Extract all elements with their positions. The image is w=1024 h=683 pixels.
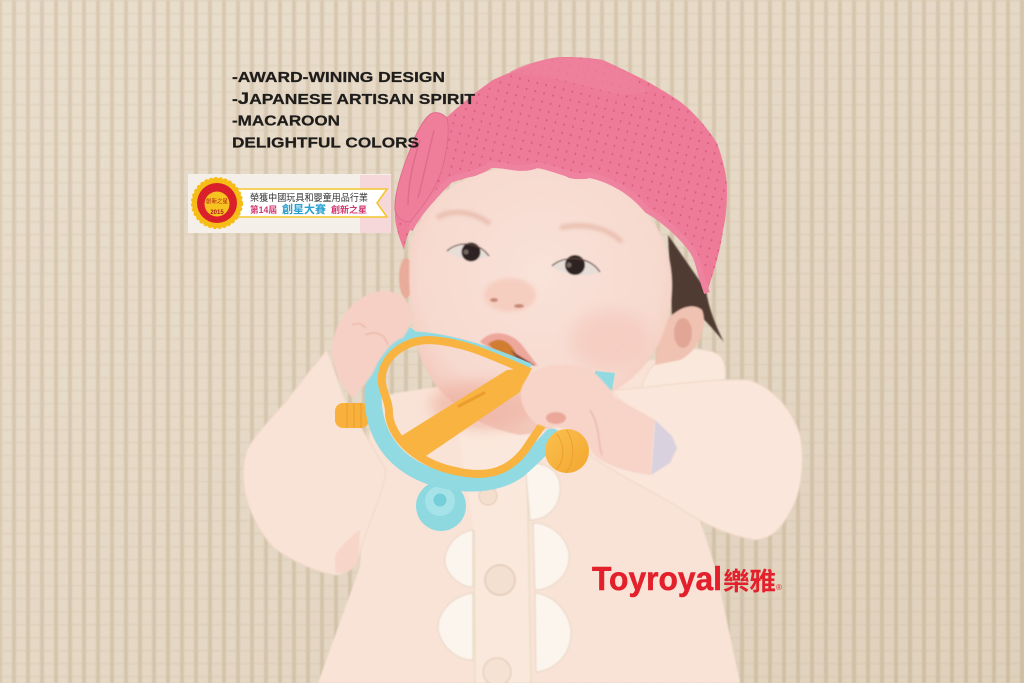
gold seal: 創新之星 bbox=[206, 197, 228, 205]
cheek blush right bbox=[570, 310, 650, 370]
left sleeve bbox=[243, 350, 386, 575]
feature list text: -JAPANESE ARTISAN SPIRIT bbox=[232, 89, 475, 108]
feature list text: -AWARD-WINING DESIGN bbox=[232, 70, 445, 86]
orange inner ring bbox=[382, 340, 542, 474]
award badge bbox=[188, 174, 391, 233]
hat brim band bbox=[410, 165, 707, 293]
left eye bbox=[447, 242, 489, 262]
right orange knob bbox=[545, 429, 589, 473]
torso bbox=[318, 360, 740, 683]
award badge: 創新之星 bbox=[331, 204, 367, 215]
shoulder collar bbox=[640, 349, 726, 392]
teether toy bbox=[335, 322, 615, 531]
hat flower bbox=[395, 113, 448, 222]
baby hand right bbox=[521, 365, 655, 475]
gold seal: 2015 bbox=[210, 210, 224, 216]
feature list text: -MACAROON bbox=[232, 114, 340, 130]
left orange grip bbox=[335, 403, 369, 428]
baby body in peach onesie bbox=[243, 349, 802, 683]
feature list text: DELIGHTFUL COLORS bbox=[232, 136, 419, 152]
orange diagonal bar bbox=[398, 368, 532, 460]
Toyroyal logo: Toyroyal bbox=[592, 560, 722, 597]
hat top lace bbox=[510, 58, 650, 95]
baby head bbox=[399, 164, 724, 435]
right ear bbox=[655, 306, 704, 365]
gold seal bbox=[192, 178, 242, 228]
chin shadow bbox=[430, 381, 540, 429]
left brow bbox=[437, 212, 490, 224]
placket bbox=[458, 428, 531, 683]
baby hand left bbox=[332, 291, 411, 398]
left ear bbox=[399, 258, 413, 298]
hair bbox=[668, 235, 724, 342]
blue wheel bbox=[416, 481, 466, 531]
feature list text bbox=[232, 70, 475, 152]
inner cuff bbox=[651, 420, 677, 475]
blue ring bbox=[373, 336, 552, 483]
buttons bbox=[485, 565, 515, 595]
nose bbox=[484, 278, 536, 312]
blue tab bbox=[394, 322, 418, 350]
right blue tab bbox=[595, 371, 615, 392]
award badge: 創星大賽 bbox=[282, 202, 326, 216]
badge text: 榮獲中國玩具和嬰童用品行業 bbox=[250, 192, 368, 204]
pink crochet hat bbox=[395, 57, 727, 293]
face bbox=[409, 164, 672, 435]
award badge: 第14屆 bbox=[250, 204, 277, 215]
armpit skin fold bbox=[335, 530, 360, 573]
ruffles bbox=[438, 463, 571, 672]
right brow bbox=[560, 226, 622, 242]
mouth bbox=[480, 333, 538, 366]
right eye bbox=[552, 255, 600, 275]
Toyroyal logo: 樂雅 bbox=[723, 568, 776, 596]
ribbon bbox=[232, 189, 387, 217]
right sleeve bbox=[590, 380, 802, 540]
Toyroyal logo: ® bbox=[776, 583, 782, 592]
